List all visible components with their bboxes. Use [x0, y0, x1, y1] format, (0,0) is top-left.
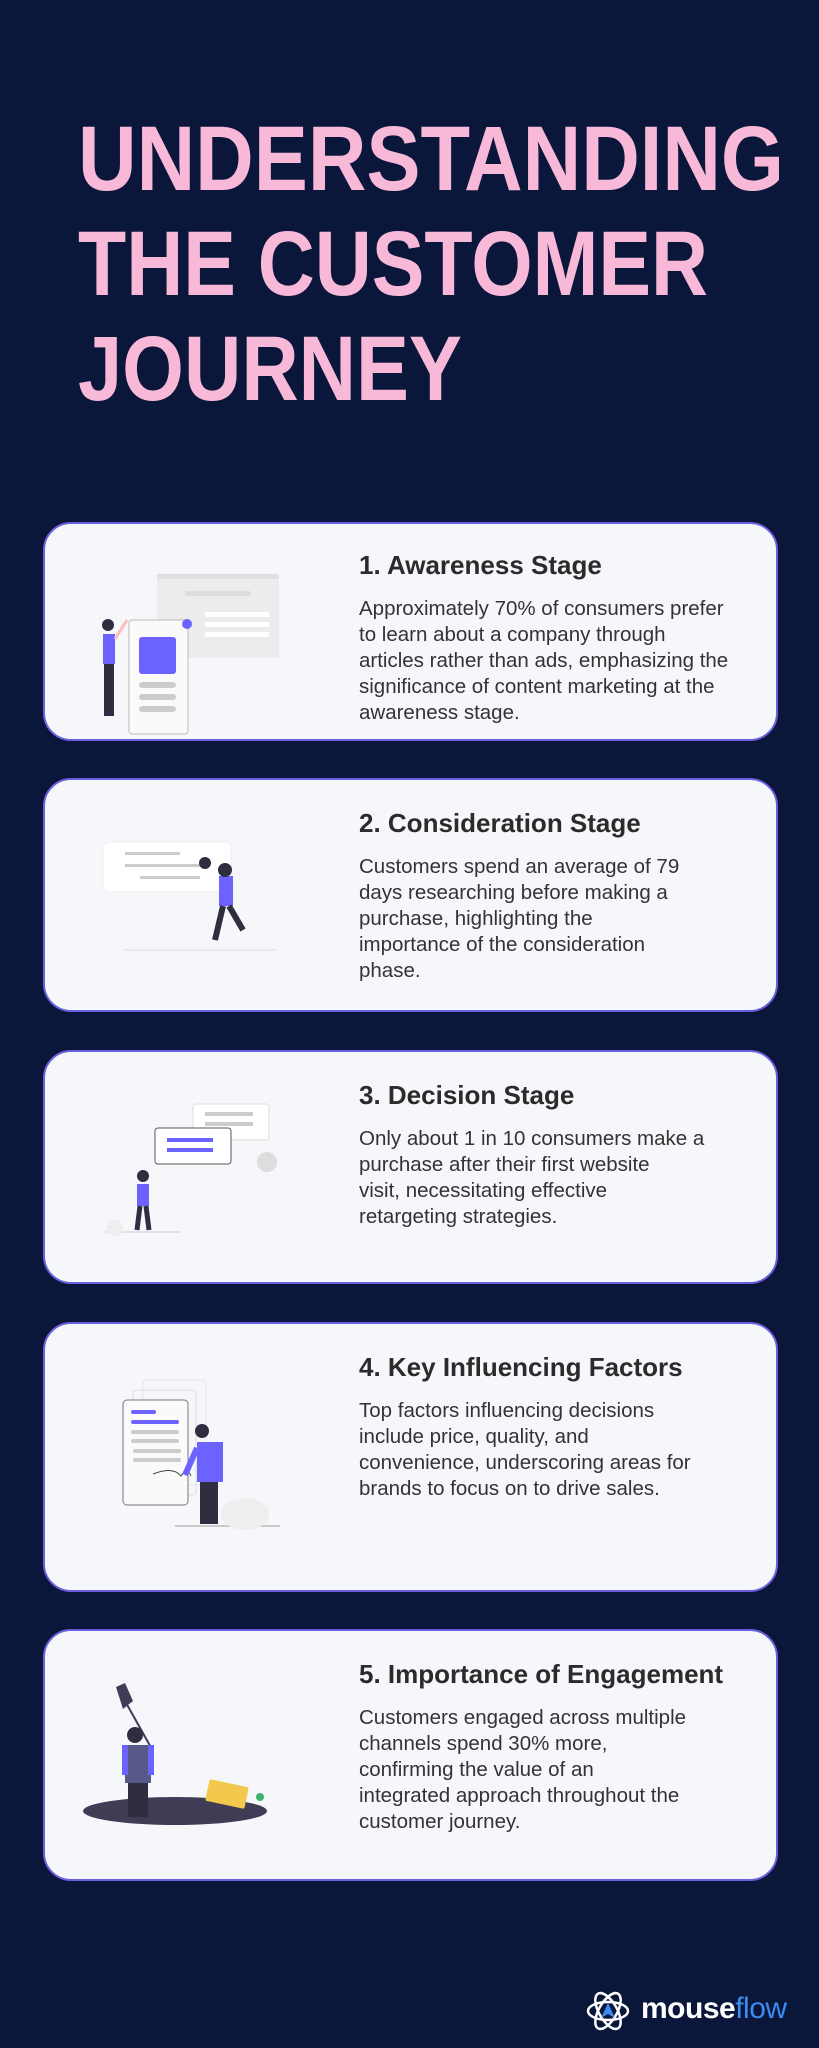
logo: mouseflow: [586, 1992, 788, 2030]
panel: engagement: [43, 1629, 778, 1881]
text: [359, 855, 679, 982]
illustration: consideration: [102, 842, 275, 950]
text: Approximately 70% of consumers prefer: [359, 597, 724, 620]
text: significance of content marketing at the: [359, 675, 715, 698]
text: [359, 1399, 691, 1500]
text: convenience, underscoring areas for: [359, 1451, 691, 1474]
text: integrated approach throughout the: [359, 1784, 679, 1807]
text: channels spend 30% more,: [359, 1732, 607, 1755]
text: purchase after their first website: [359, 1153, 650, 1176]
text: articles rather than ads, emphasizing the: [359, 649, 728, 672]
text: Customers engaged across multiple: [359, 1706, 686, 1729]
wordmark: mouseflow: [641, 1992, 787, 2025]
title: JOURNEY: [78, 318, 462, 420]
illustration: decision: [105, 1104, 277, 1236]
text: purchase, highlighting the: [359, 907, 593, 930]
panel: consideration: [43, 778, 778, 1012]
text: retargeting strategies.: [359, 1205, 557, 1228]
text: Top factors influencing decisions: [359, 1399, 654, 1422]
title: THE CUSTOMER: [78, 213, 708, 315]
text: [359, 597, 728, 724]
panel: decision: [43, 1050, 778, 1284]
heading: 5. Importance of Engagement: [359, 1659, 723, 1689]
text: [359, 1706, 686, 1833]
text: [359, 1127, 704, 1228]
text: importance of the consideration: [359, 933, 645, 956]
text: days researching before making a: [359, 881, 668, 904]
text: visit, necessitating effective: [359, 1179, 607, 1202]
illustration: treasure: [83, 1683, 267, 1825]
heading: 4. Key Influencing Factors: [359, 1352, 683, 1382]
heading: 1. Awareness Stage: [359, 550, 602, 580]
text: awareness stage.: [359, 701, 520, 724]
illustration: contract: [122, 1380, 280, 1530]
text: Only about 1 in 10 consumers make a: [359, 1127, 704, 1150]
text: customer journey.: [359, 1810, 520, 1833]
text: confirming the value of an: [359, 1758, 594, 1781]
icon: atom: [586, 1992, 630, 2030]
illustration: awareness: [102, 574, 279, 734]
text: Customers spend an average of 79: [359, 855, 679, 878]
title: [78, 108, 784, 420]
panel: influencing factors: [43, 1322, 778, 1592]
text: brands to focus on to drive sales.: [359, 1477, 660, 1500]
heading: 2. Consideration Stage: [359, 808, 641, 838]
text: to learn about a company through: [359, 623, 666, 646]
text: include price, quality, and: [359, 1425, 589, 1448]
heading: 3. Decision Stage: [359, 1080, 574, 1110]
panel: awareness: [43, 522, 778, 741]
text: phase.: [359, 959, 421, 982]
